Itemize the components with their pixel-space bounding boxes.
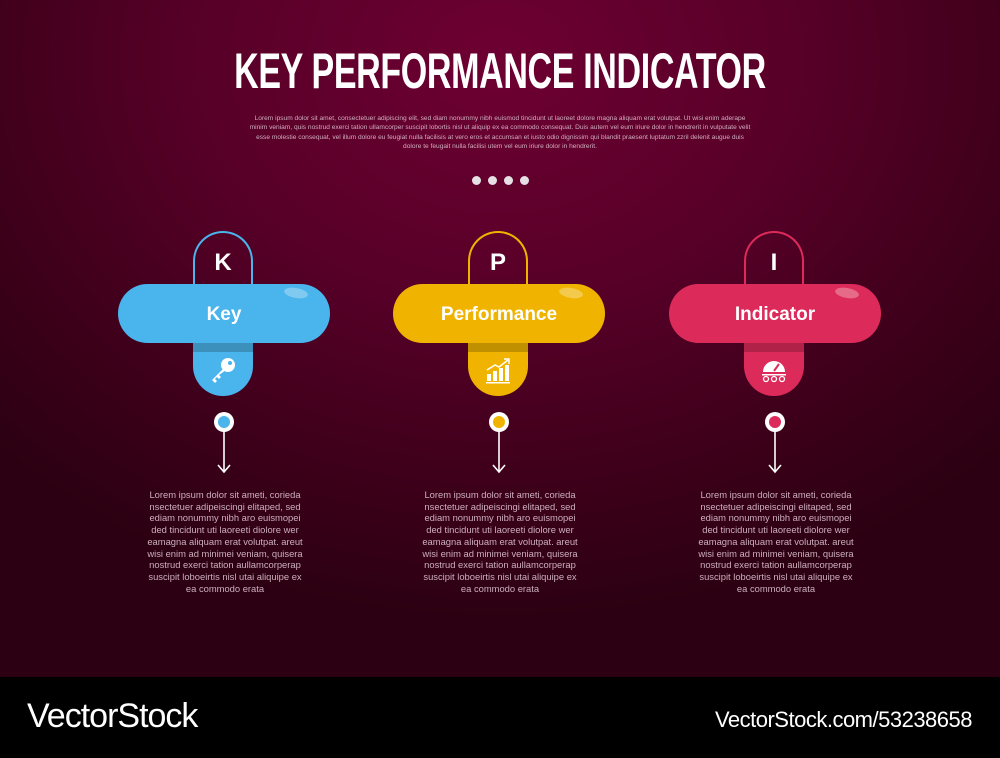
arrow xyxy=(218,432,230,474)
dots xyxy=(472,176,529,185)
pill Performance xyxy=(393,284,605,343)
tab letter P: P xyxy=(490,249,506,276)
panel: Indicator xyxy=(669,231,881,594)
text block: Lorem ipsum dolor sit ameti, corieda nsectetuer adipeiscingi elitaped, sed ediam nonummy nibh aro euismopei ded tincidunt uti laoreeti diolore wer eamagna aliquam erat volutpat. areut wisi enim ad minimei veniam, quisera nostrud exerci tation aullamcorperap suscipit loboeirtis nisl utai aliquipe ex ea commodo erata xyxy=(698,489,854,594)
icon: growth chart xyxy=(468,343,528,396)
pill Indicator: Indicator xyxy=(735,304,815,325)
panel: Key xyxy=(118,231,330,594)
icon: key xyxy=(193,343,253,396)
pin marker xyxy=(214,412,234,432)
panel: Performance xyxy=(393,231,605,594)
footer url: VectorStock.com/53238658 xyxy=(715,707,972,732)
text block: Lorem ipsum dolor sit ameti, corieda nsectetuer adipeiscingi elitaped, sed ediam nonummy nibh aro euismopei ded tincidunt uti laoreeti diolore wer eamagna aliquam erat volutpat. areut wisi enim ad minimei veniam, quisera nostrud exerci tation aullamcorperap suscipit loboeirtis nisl utai aliquipe ex ea commodo erata xyxy=(147,489,303,594)
pin marker xyxy=(489,412,509,432)
footer bar xyxy=(0,677,1000,758)
tab letter I xyxy=(744,231,804,291)
icon: gauge xyxy=(744,343,804,396)
tab letter K xyxy=(193,231,253,291)
pill Key: Key xyxy=(207,304,241,325)
footer logo: VectorStock xyxy=(27,697,197,735)
arrow xyxy=(768,432,782,474)
subtitle text: Lorem ipsum dolor sit amet, consectetuer adipiscing elit, sed diam nonummy nibh euismod tincidunt ut laoreet dolore magna aliquam erat volutpat. Ut wisi enim aderape minim veniam, quis nostrud exerci tation ullamcorper suscipit lobortis nisl ut aliquip ex ea commodo consequat. Duis autem vel eum iriure dolor in hendrerit in vulputate velit esse molestie consequat, vel illum dolore eu feugiat nulla facilisis at vero eros et accumsan et iusto odio dignissim qui blandit praesent luptatum zzril delenit augue duis dolore te feugait nulla facilisi utem vel eum iriure dolor in hendrerit. xyxy=(250,115,750,150)
tab letter P xyxy=(468,231,528,291)
tab letter K: K xyxy=(214,249,232,276)
pill Performance: Performance xyxy=(441,304,557,325)
text block: Lorem ipsum dolor sit ameti, corieda nsectetuer adipeiscingi elitaped, sed ediam nonummy nibh aro euismopei ded tincidunt uti laoreeti diolore wer eamagna aliquam erat volutpat. areut wisi enim ad minimei veniam, quisera nostrud exerci tation aullamcorperap suscipit loboeirtis nisl utai aliquipe ex ea commodo erata xyxy=(422,489,578,594)
arrow xyxy=(492,432,506,474)
pin marker xyxy=(765,412,785,432)
tab letter I: I xyxy=(771,249,777,276)
pill Indicator xyxy=(669,284,881,343)
title: KEY PERFORMANCE INDICATOR xyxy=(234,43,766,99)
pill Key xyxy=(118,284,330,343)
